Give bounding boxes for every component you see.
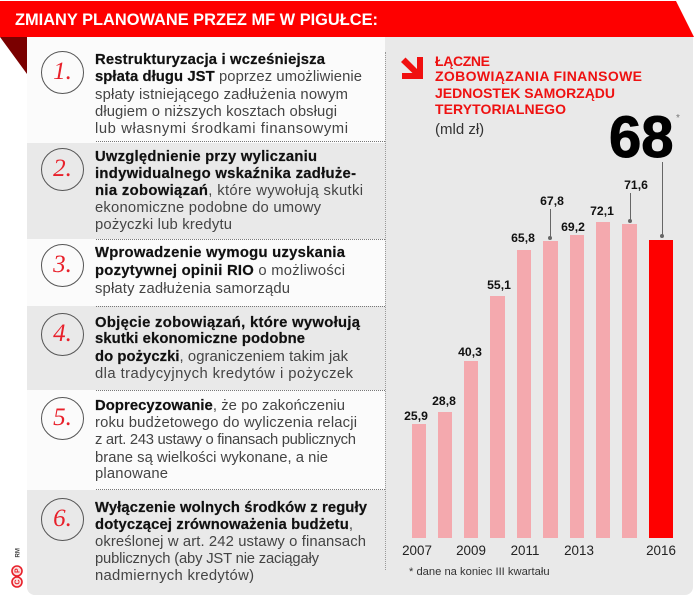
unit: (mld zł) (435, 121, 484, 138)
number 1: 1. (53, 58, 72, 85)
panel: item 1 (27, 37, 385, 143)
year labels: 2007 (402, 543, 432, 558)
text item 4: skutki ekonomiczne podobne (95, 331, 305, 347)
text item 1: lub własnymi środkami finansowymi (95, 121, 348, 137)
number 2: 2. (53, 155, 72, 182)
chart title: TERYTORIALNEGO (435, 101, 566, 117)
asterisk: * (676, 113, 680, 124)
chart title: JEDNOSTEK SAMORZĄDU (435, 85, 615, 101)
text item 3: Wprowadzenie wymogu uzyskania (95, 245, 346, 261)
chart title: ZOBOWIĄZANIA FINANSOWE (435, 68, 642, 84)
text item 4: do pożyczki, ograniczeniem takim jak (95, 349, 349, 365)
panel: item 5 (27, 390, 385, 490)
title: ZMIANY PLANOWANE PRZEZ MF W PIGUŁCE: (15, 11, 378, 29)
text item 1: Restrukturyzacja i wcześniejsza (95, 52, 326, 68)
text item 1: długiem o niższych kosztach obsługi (95, 104, 337, 120)
panel: item 3 (27, 239, 385, 306)
text item 2: ekonomiczne podobne do umowy (95, 200, 322, 216)
text item 2: nia zobowiązań, które wywołują skutki (95, 183, 363, 199)
text item 1 (95, 52, 362, 137)
bar chart: 40,3 (458, 345, 482, 359)
header ribbon (0, 1, 694, 37)
text item 2: indywidualnego wskaźnika zadłuże- (95, 166, 356, 182)
headline value 68: 68 (609, 105, 674, 170)
bar chart: 28,8 (432, 394, 456, 408)
text item 1: spłaty istniejącego zadłużenia nowym (95, 87, 348, 103)
ribbon fold (0, 37, 27, 74)
panel: item 2 (27, 143, 385, 239)
text item 6: nadmiernych kredytów) (95, 568, 254, 584)
bar chart: 2016 (646, 543, 676, 558)
bars (412, 424, 426, 538)
bar chart: 65,8 (511, 231, 535, 245)
number 3: 3. (53, 251, 72, 278)
number 5: 5. (53, 404, 72, 431)
text item 5 (95, 398, 357, 482)
text item 5: z art. 243 ustawy o finansach publicznych (95, 432, 356, 448)
number 4 (41, 313, 84, 356)
bar chart: 67,8 (540, 194, 564, 208)
number 6 (41, 498, 84, 541)
text item 6: określonej w art. 242 ustawy o finansach (95, 534, 366, 550)
panel: item 4 (27, 306, 385, 390)
chart title (435, 53, 642, 117)
text item 6: publicznych (aby JST nie zaciągały (95, 551, 320, 567)
text item 6: Wyłączenie wolnych środków z reguły (95, 500, 368, 516)
text item 6 (95, 500, 368, 584)
number 3 (41, 244, 84, 287)
credit: P (14, 568, 22, 573)
bar chart: 2013 (564, 543, 594, 558)
bar chart: 72,1 (590, 204, 614, 218)
chart title: ŁĄCZNE (435, 53, 490, 69)
bar chart: 69,2 (561, 220, 585, 234)
text item 2 (95, 149, 363, 233)
number 2 (41, 148, 84, 191)
text item 5: brane są wielkości wykonane, a nie (95, 450, 328, 466)
value labels: 25,9 (404, 409, 428, 423)
credit: RM (16, 548, 22, 558)
text item 5: roku budżetowego do wyliczenia relacji (95, 415, 357, 431)
text item 3 (95, 245, 346, 297)
number 1 (41, 51, 84, 94)
footnote: * dane na koniec III kwartału (409, 566, 550, 578)
text item 5: planowane (95, 466, 168, 482)
bar chart: 71,6 (624, 178, 648, 192)
text item 2: Uwzględnienie przy wyliczaniu (95, 149, 317, 165)
text item 4: Objęcie zobowiązań, które wywołują (95, 315, 361, 331)
text item 4: dla tradycyjnych kredytów i pożyczek (95, 366, 354, 382)
number 5 (41, 397, 84, 440)
number 6: 6. (53, 505, 72, 532)
text item 1: spłata długu JST poprzez umożliwienie (95, 69, 362, 85)
text item 2: pożyczki lub kredytu (95, 217, 232, 233)
text item 6: dotyczącej zrównoważenia budżetu, (95, 517, 353, 533)
text item 3: spłaty zadłużenia samorządu (95, 281, 290, 297)
bar chart: 2011 (511, 543, 539, 558)
icon: red arrow (401, 57, 423, 79)
leader lines (550, 209, 551, 238)
text item 5: Doprecyzowanie, że po zakończeniu (95, 398, 345, 414)
text item 4 (95, 315, 361, 382)
panel: item 6 (27, 490, 385, 595)
bar chart: 55,1 (487, 278, 511, 292)
number 4: 4. (53, 320, 72, 347)
bar chart: 2009 (456, 543, 486, 558)
text item 3: pozytywnej opinii RIO o możliwości (95, 263, 345, 279)
credit (11, 548, 23, 588)
credit: C (14, 579, 22, 584)
